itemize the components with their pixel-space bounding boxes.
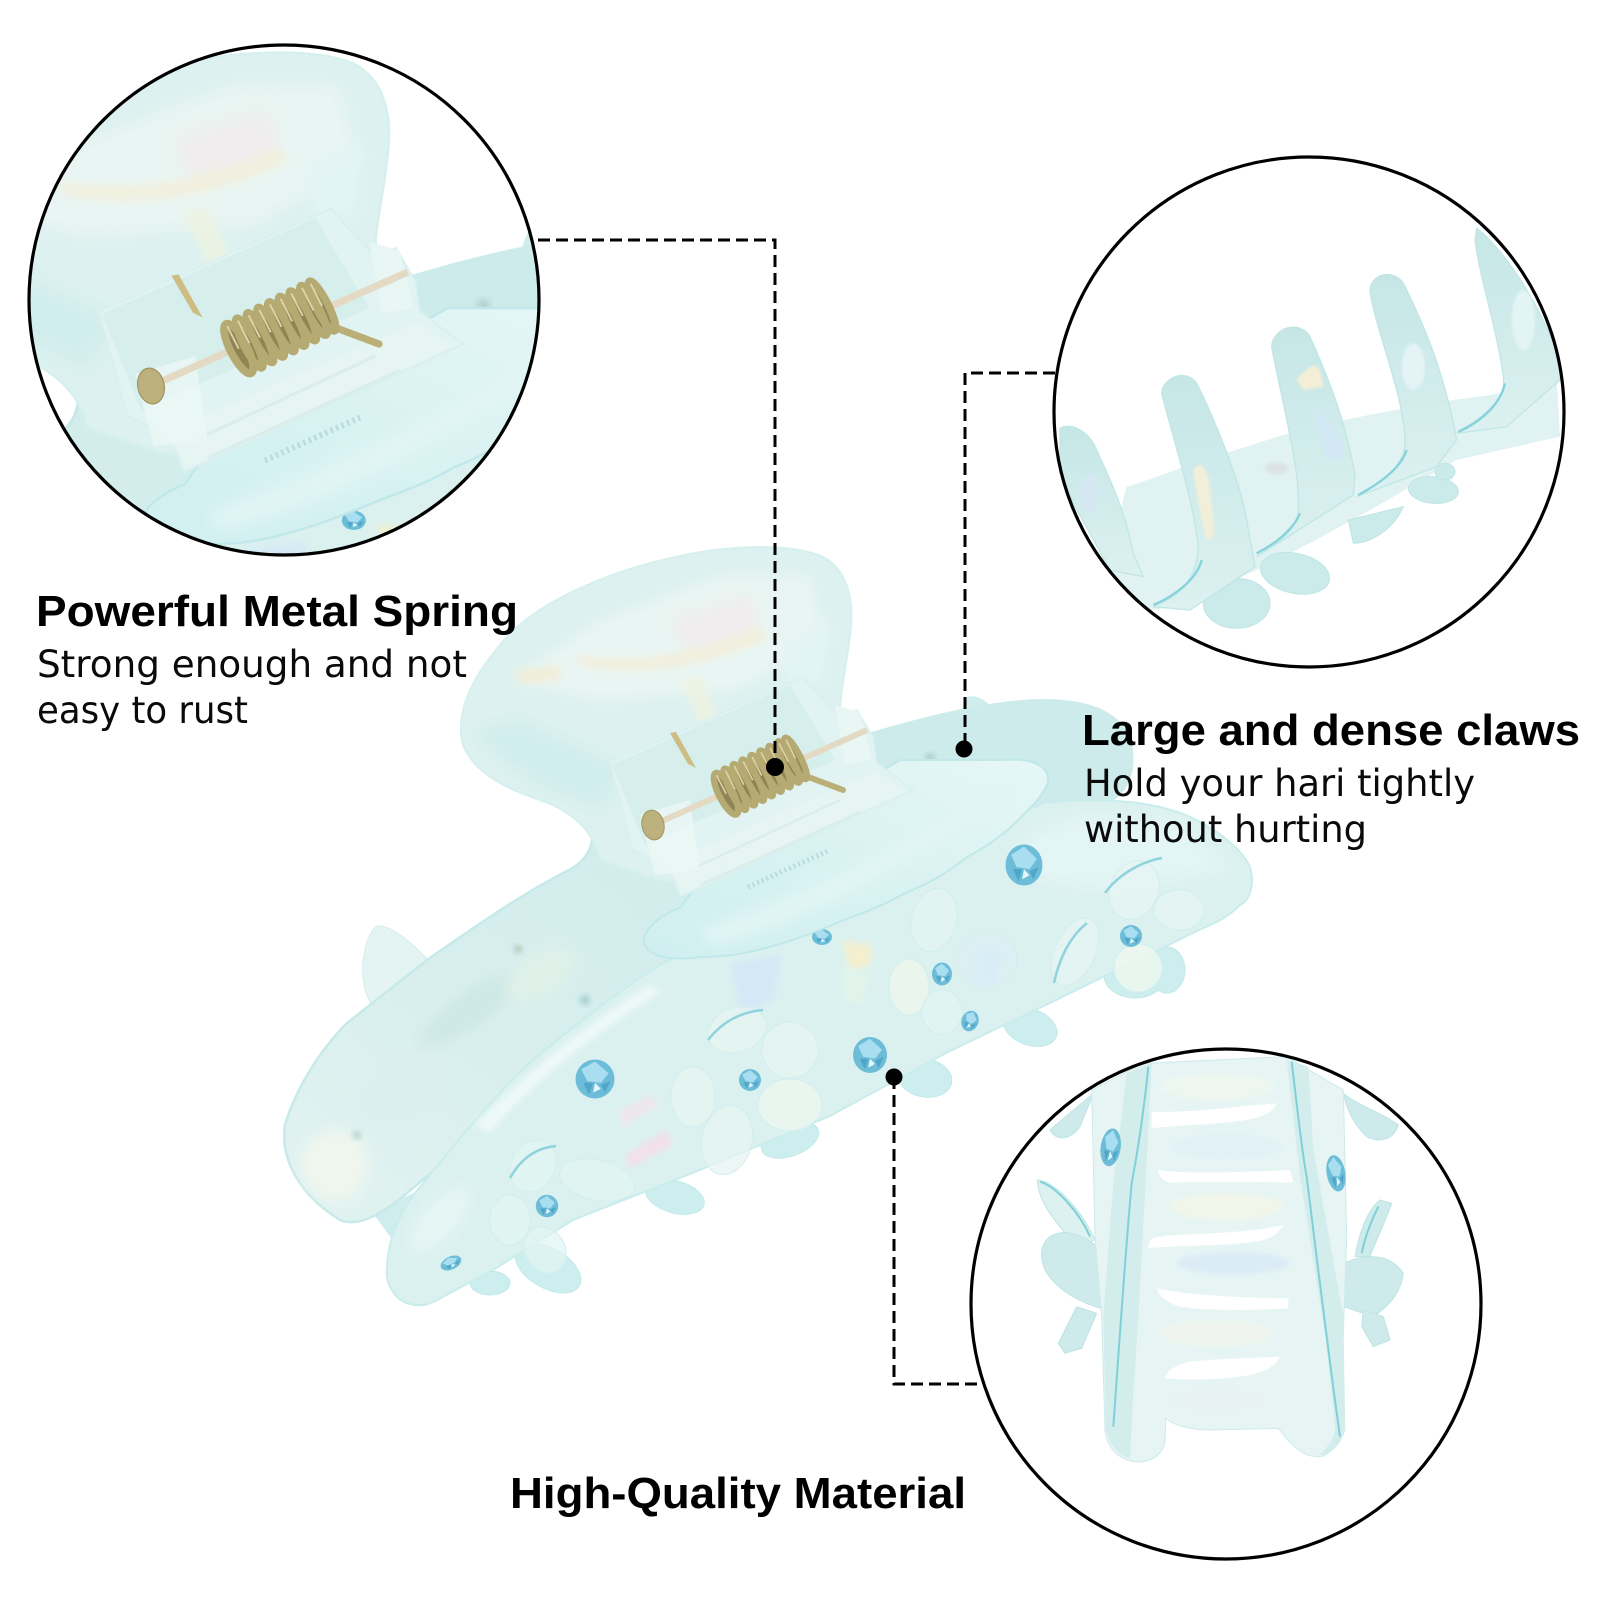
gaps between bars <box>1148 1103 1293 1379</box>
bar sheen patches <box>1165 1194 1286 1344</box>
text block: claws: Hold your hari tightly <box>1084 762 1475 805</box>
text block: claws: Large and dense claws <box>1082 706 1580 755</box>
text block: material: High-Quality Material <box>510 1469 966 1518</box>
material close-up <box>1037 1057 1403 1462</box>
claw body band <box>1103 380 1560 610</box>
circle outline <box>1054 157 1564 667</box>
connector: claws callout <box>956 373 1055 758</box>
main hair claw product <box>284 547 1252 1305</box>
left rail <box>1103 1063 1152 1458</box>
right rail <box>1287 1060 1345 1455</box>
spring close-up <box>0 53 870 962</box>
connector: spring callout <box>538 240 784 776</box>
text block: metal spring: Strong enough and not <box>37 643 467 686</box>
claw 4 <box>1357 275 1457 497</box>
rear pin mark <box>1265 462 1288 474</box>
claws close-up <box>1060 228 1560 628</box>
text block: claws <box>1082 706 1580 851</box>
connector: material callout <box>886 1068 983 1384</box>
flower arms <box>1037 1093 1403 1353</box>
clip body <box>1092 1057 1347 1462</box>
circle outline <box>29 45 539 555</box>
panel: claws detail circle <box>1054 157 1564 667</box>
text block: metal spring: Powerful Metal Spring <box>36 587 518 636</box>
text block: claws: without hurting <box>1084 808 1367 851</box>
side rhinestones <box>1100 1128 1121 1166</box>
claw 1 <box>1060 426 1143 577</box>
panel: material detail circle <box>971 1049 1481 1559</box>
claw 3 <box>1257 327 1355 557</box>
claw 2 <box>1153 376 1255 610</box>
text block: metal spring: easy to rust <box>37 689 248 732</box>
blue seam lines <box>1040 1062 1378 1437</box>
flower petals under band <box>1203 463 1459 628</box>
claw 5 <box>1457 228 1560 433</box>
circle outline <box>971 1049 1481 1559</box>
text block: metal spring <box>36 587 518 732</box>
panel: spring detail circle <box>0 45 870 962</box>
claw sheen patches <box>1080 290 1535 540</box>
blue seam lines <box>1153 383 1505 605</box>
